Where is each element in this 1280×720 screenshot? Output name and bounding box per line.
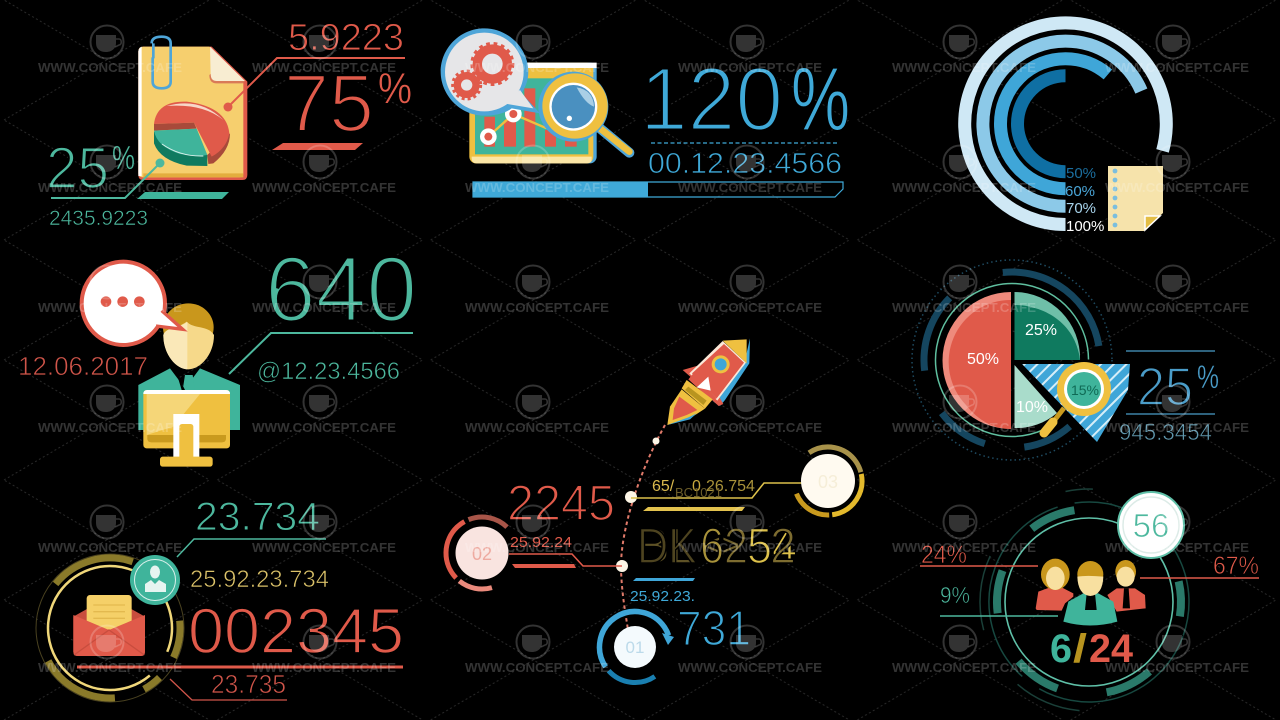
label: 24%: 24% — [921, 541, 967, 569]
text: 00.12.23.4566: 00.12.23.4566 — [648, 148, 842, 180]
watermark grid: WWW.CONCEPT.CAFE — [465, 540, 609, 555]
bar: teal — [137, 192, 229, 199]
watermark grid: WWW.CONCEPT.CAFE — [465, 300, 609, 315]
watermark grid: WWW.CONCEPT.CAFE — [1105, 60, 1249, 75]
text: 23.734: 23.734 — [195, 495, 320, 539]
watermark grid: WWW.CONCEPT.CAFE — [892, 660, 1036, 675]
text: 6/24: 24 — [1089, 627, 1134, 671]
leader line: teal — [51, 158, 164, 198]
icon: person with monitor and speech bubble — [82, 262, 240, 467]
icon: sticky note — [1108, 166, 1163, 231]
overlapping numerals: 54 — [747, 518, 797, 574]
overlapping numerals: 2 — [770, 518, 796, 574]
text: 25 percent: % — [112, 139, 135, 176]
step 03: 0 — [692, 478, 701, 495]
text: 640: 640 — [265, 237, 417, 341]
watermark grid: WWW.CONCEPT.CAFE — [252, 180, 396, 195]
text: @12.23.4566: @12.23.4566 — [257, 358, 400, 385]
watermark grid: WWW.CONCEPT.CAFE — [1105, 300, 1249, 315]
panel: mail 002345 — [11, 495, 404, 720]
text: 5.9223: 5.9223 — [288, 17, 404, 59]
icon: envelope with letter — [73, 595, 145, 656]
path markers — [616, 438, 660, 572]
text: 731: 731 — [677, 602, 751, 656]
watermark grid: WWW.CONCEPT.CAFE — [892, 540, 1036, 555]
step 02: 02 — [472, 544, 492, 564]
watermark grid: WWW.CONCEPT.CAFE — [38, 60, 182, 75]
step 03 — [631, 434, 875, 574]
panel: person at computer 640 — [18, 237, 417, 467]
watermark grid: WWW.CONCEPT.CAFE — [38, 660, 182, 675]
step 02: 25.92.24 — [510, 534, 572, 551]
text: 25 percent: 25 — [46, 136, 109, 201]
text: 25 percent blue: 25 — [1137, 357, 1193, 417]
labels: pie percentages — [967, 322, 1099, 416]
chart: pie — [942, 292, 1130, 442]
watermark grid: WWW.CONCEPT.CAFE — [678, 60, 822, 75]
watermark grid: WWW.CONCEPT.CAFE — [678, 540, 822, 555]
label: 67% — [1140, 552, 1259, 580]
watermark grid: WWW.CONCEPT.CAFE — [1105, 420, 1249, 435]
overlapping numerals: > — [722, 529, 740, 562]
watermark grid: WWW.CONCEPT.CAFE — [465, 420, 609, 435]
labels: ring percentages — [1065, 165, 1104, 235]
watermark grid: WWW.CONCEPT.CAFE — [38, 420, 182, 435]
watermark grid: WWW.CONCEPT.CAFE — [252, 540, 396, 555]
labels: pie percentages: 25% — [1025, 322, 1057, 339]
label: 67%: 67% — [1213, 552, 1259, 580]
watermark grid: WWW.CONCEPT.CAFE — [465, 660, 609, 675]
text: 945.3454: 945.3454 — [1119, 419, 1212, 445]
label: 24% — [920, 541, 1038, 569]
labels: ring percentages: 70% — [1066, 200, 1096, 217]
rings — [11, 529, 209, 720]
step 03: 03 — [818, 472, 838, 492]
icon: document with pie chart — [138, 37, 247, 180]
watermark grid: WWW.CONCEPT.CAFE — [252, 420, 396, 435]
panel: pie chart 25% — [888, 236, 1219, 484]
text: 25 percent blue — [1126, 351, 1219, 417]
icon: person badge — [130, 555, 180, 605]
text: 2435.9223: 2435.9223 — [49, 207, 148, 230]
icon: three people — [1036, 559, 1146, 625]
text: 25 percent blue: % — [1197, 359, 1219, 395]
rings: decorative arcs — [888, 236, 1136, 484]
watermark grid: WWW.CONCEPT.CAFE — [678, 660, 822, 675]
text: 6/24: / — [1073, 627, 1087, 671]
labels: pie percentages: 15% — [1071, 382, 1099, 398]
labels: ring percentages: 50% — [1066, 165, 1096, 182]
step 02 — [431, 475, 622, 604]
watermark grid: WWW.CONCEPT.CAFE — [465, 60, 609, 75]
watermark grid: WWW.CONCEPT.CAFE — [892, 300, 1036, 315]
text: 120 percent: 120 — [640, 50, 783, 150]
panel: analytics 120% — [441, 28, 850, 197]
bar: red — [272, 143, 363, 150]
text: 23.735: 23.735 — [211, 669, 286, 699]
watermark grid: WWW.CONCEPT.CAFE — [892, 420, 1036, 435]
circle: 56 — [1118, 492, 1184, 558]
watermark grid: WWW.CONCEPT.CAFE — [1105, 540, 1249, 555]
labels: ring percentages: 60% — [1065, 183, 1095, 200]
watermark grid: WWW.CONCEPT.CAFE — [1105, 180, 1249, 195]
watermark grid: WWW.CONCEPT.CAFE — [892, 60, 1036, 75]
labels: ring percentages: 100% — [1066, 218, 1104, 235]
watermark grid: WWW.CONCEPT.CAFE — [678, 180, 822, 195]
watermark grid: WWW.CONCEPT.CAFE — [252, 660, 396, 675]
watermark grid: WWW.CONCEPT.CAFE — [1105, 660, 1249, 675]
step 01: 25.92.23. — [630, 588, 695, 605]
overlapping numerals: < — [703, 529, 721, 562]
watermark grid: WWW.CONCEPT.CAFE — [892, 180, 1036, 195]
text: 6/24 — [1050, 627, 1134, 671]
panel: team 6/24 — [920, 468, 1259, 720]
overlapping numerals: 62 — [700, 518, 748, 574]
text: 2245: 2245 — [507, 475, 615, 531]
rings — [955, 468, 1223, 720]
chart: radial rings — [965, 23, 1166, 225]
step 03: 65/ — [652, 478, 675, 495]
watermark grid: WWW.CONCEPT.CAFE — [252, 300, 396, 315]
leader line: red — [224, 58, 405, 112]
flight path — [621, 425, 665, 630]
text: 6/24: 6 — [1050, 627, 1072, 671]
text: 25.92.23.734: 25.92.23.734 — [190, 566, 329, 593]
watermark grid: WWW.CONCEPT.CAFE — [38, 180, 182, 195]
watermark grid: WWW.CONCEPT.CAFE — [38, 540, 182, 555]
text: 12.06.2017: 12.06.2017 — [18, 351, 148, 381]
step 03: BC1021 — [675, 485, 722, 500]
text: 75 percent: 75 — [284, 58, 374, 149]
step 01 — [586, 578, 751, 696]
step 03: 26.754 — [706, 478, 755, 495]
overlapping numerals: BL — [637, 518, 697, 574]
panel: concentric ring chart — [965, 23, 1166, 235]
label: 9%: 9% — [940, 582, 970, 608]
icon: chart board with gears and magnifier — [441, 28, 629, 163]
overlapping numerals: 6 — [700, 518, 724, 574]
text: 120 percent: % — [791, 50, 850, 150]
icon: magnifier — [1044, 362, 1111, 433]
progress bar — [473, 182, 843, 197]
labels: pie percentages: 50% — [967, 351, 999, 368]
watermark grid: WWW.CONCEPT.CAFE — [465, 180, 609, 195]
label: 9% — [940, 582, 1058, 616]
overlapping numerals: DK — [637, 518, 697, 574]
panel: document pie chart 75% and 25% — [46, 17, 412, 230]
watermark grid: WWW.CONCEPT.CAFE — [678, 420, 822, 435]
circle: 56: 56 — [1133, 507, 1169, 544]
watermark grid: WWW.CONCEPT.CAFE — [678, 300, 822, 315]
watermark grid: WWW.CONCEPT.CAFE — [252, 60, 396, 75]
watermark grid: WWW.CONCEPT.CAFE — [38, 300, 182, 315]
text: 75 percent: % — [378, 64, 412, 113]
icon: rocket — [667, 338, 750, 425]
text: 002345: 002345 — [188, 595, 404, 667]
step 01: 01 — [626, 638, 644, 657]
panel: rocket timeline — [431, 338, 875, 696]
overlapping numerals — [637, 518, 797, 574]
labels: pie percentages: 10% — [1016, 399, 1048, 416]
